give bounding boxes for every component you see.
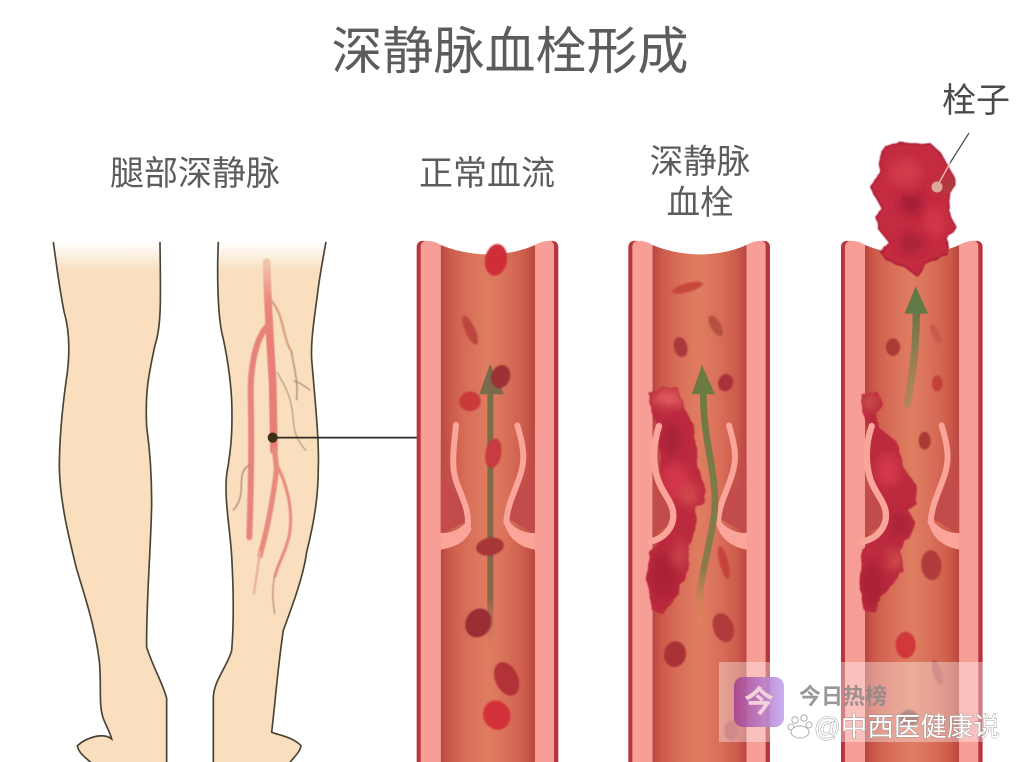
icon: app badge: [734, 677, 784, 727]
red blood cells: [662, 279, 739, 741]
left leg: [53, 242, 167, 762]
red blood cells: [886, 322, 945, 728]
watermark: [719, 662, 1000, 742]
heading: normal blood flow: 正常血流: [419, 155, 555, 193]
icon: app badge: 今: [744, 686, 774, 719]
marker dot: [268, 433, 278, 443]
flow arrow: [479, 364, 504, 651]
valve over clot: [650, 426, 673, 541]
embolus clot: [872, 143, 956, 275]
panel: legs: [53, 242, 417, 762]
heading: deep vein thrombosis: 血栓: [666, 185, 734, 222]
title: 深静脉血栓形成: [331, 23, 689, 80]
red blood cells: [459, 242, 524, 735]
thrombus clot: [647, 388, 705, 612]
watermark app name: 今日热榜: [799, 684, 887, 709]
heading: leg deep veins: 腿部深静脉: [110, 155, 280, 193]
main deep vein with branches: [233, 262, 310, 613]
flow arrow: [692, 365, 715, 627]
flow arrow: [905, 286, 928, 408]
embolus pointer line: [932, 133, 969, 192]
vessel body: [628, 241, 770, 762]
watermark translucent band: [719, 662, 983, 742]
panel: deep vein thrombosis vessel: [628, 241, 770, 762]
valve over clot: [863, 426, 886, 541]
panel: normal blood flow vessel: [417, 241, 558, 762]
right leg: [213, 242, 326, 762]
connector line from vein to valve: [273, 435, 417, 440]
heading: embolus: 栓子: [942, 82, 1010, 120]
watermark account name: @中西医健康说: [814, 712, 1000, 742]
remaining thrombus clot: [860, 393, 917, 612]
vessel body: [417, 241, 558, 762]
icon: social logo: [788, 715, 812, 738]
vessel body: [841, 241, 983, 762]
panel: embolus vessel: [841, 133, 983, 762]
heading: deep vein thrombosis: 深静脉: [650, 144, 750, 181]
